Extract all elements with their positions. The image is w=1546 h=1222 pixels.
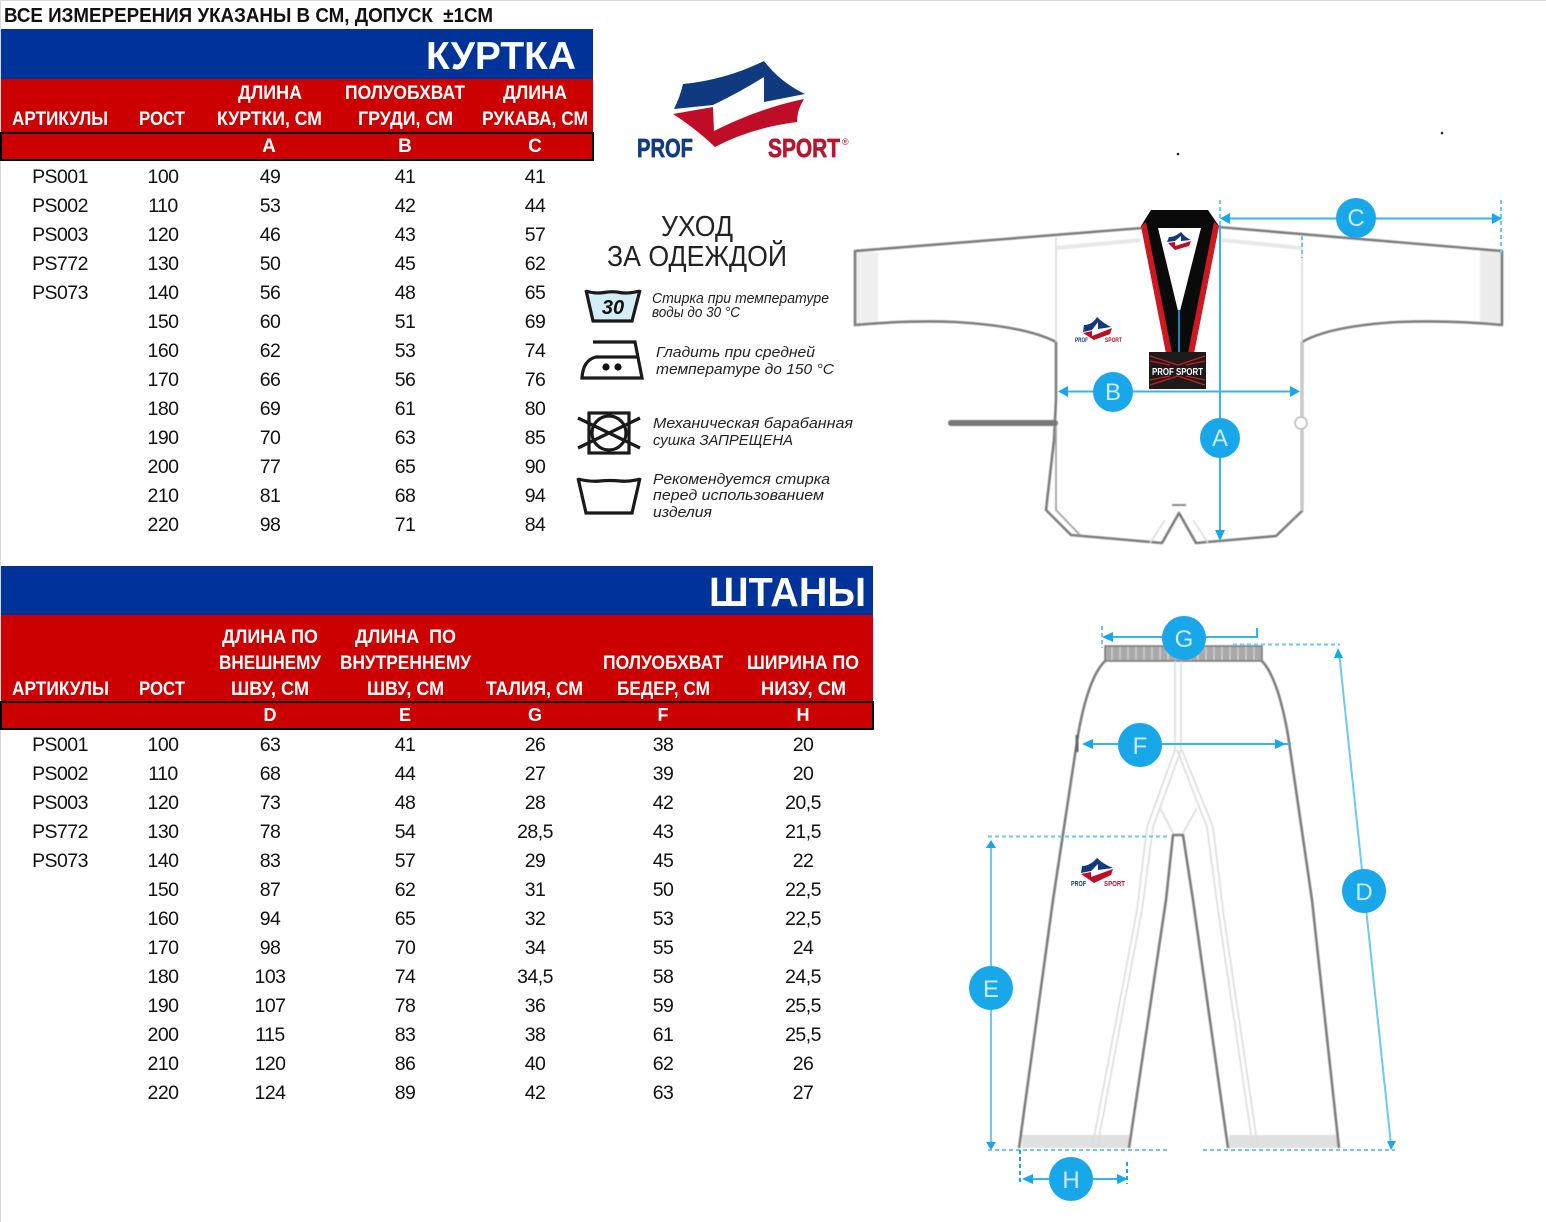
trousers table rows: 22: [793, 850, 813, 872]
trousers outline: [1019, 646, 1339, 1148]
trousers table rows: 124: [255, 1082, 286, 1104]
trousers table rows: 39: [653, 763, 673, 785]
trousers table rows: 115: [255, 1024, 285, 1046]
jacket table rows: 110: [148, 195, 178, 217]
trousers table rows: 53: [653, 908, 673, 930]
trousers table rows: 29: [525, 850, 545, 872]
jacket table rows: 50: [260, 253, 281, 275]
trousers table rows: 25,5: [785, 995, 822, 1017]
jacket table rows: PS002: [32, 195, 88, 217]
measure D: [1203, 644, 1396, 1150]
jacket table column headers: АРТИКУЛЫ: [12, 109, 108, 130]
panel: jacket size table: [1, 29, 593, 536]
trousers table rows: 100: [148, 734, 179, 756]
care heading: ЗА ОДЕЖДОЙ: [607, 239, 787, 273]
trousers table rows: 55: [653, 937, 674, 959]
jacket table rows: 49: [260, 166, 280, 188]
trousers table rows: 57: [395, 850, 415, 872]
trousers table column headers: ДЛИНА ПО: [355, 627, 456, 648]
trousers table rows: 120: [148, 792, 179, 814]
panel: garment care: [578, 211, 853, 521]
care text: washing: воды до 30 °С: [652, 304, 740, 321]
trousers table column headers: АРТИКУЛЫ: [12, 679, 109, 700]
jacket table rows: 85: [525, 427, 546, 449]
trousers table rows: 78: [260, 821, 280, 843]
trousers table column headers: ВНЕШНЕМУ: [219, 653, 321, 674]
trousers table rows: 170: [148, 937, 179, 959]
jacket table rows: 48: [395, 282, 415, 304]
jacket table column headers: ДЛИНА: [503, 83, 567, 104]
trousers table rows: 110: [148, 763, 178, 785]
jacket table column headers: ПОЛУОБХВАТ: [345, 83, 465, 104]
trousers table column headers: ВНУТРЕННЕМУ: [340, 653, 471, 674]
jacket table rows: 120: [148, 224, 179, 246]
trousers table rows: 20: [793, 734, 814, 756]
trousers table measurement letters: E: [399, 705, 411, 725]
trousers table rows: 200: [148, 1024, 179, 1046]
jacket table column headers: КУРТКИ, СМ: [217, 109, 322, 130]
trousers table rows: 27: [525, 763, 545, 785]
measure D: D: [1355, 879, 1373, 906]
trousers logo: SPORT: [1104, 881, 1126, 888]
diagram: jacket: [855, 198, 1502, 543]
trousers table rows: 54: [395, 821, 416, 843]
care heading: УХОД: [661, 211, 733, 243]
jacket table rows: 210: [148, 485, 179, 507]
care text: washing: Стирка при температуре: [652, 290, 829, 307]
trousers table rows: 42: [653, 792, 673, 814]
trousers table rows: 83: [260, 850, 280, 872]
trousers table column headers: ШВУ, СМ: [231, 679, 309, 700]
jacket table rows: 42: [395, 195, 415, 217]
note: measurement tolerance: ВСЕ ИЗМЕРЕРЕНИЯ УКАЗАНЫ В СМ, ДОПУСК ±1СМ: [4, 5, 493, 27]
trousers table rows: 28,5: [517, 821, 554, 843]
trousers table measurement letters: H: [796, 705, 810, 725]
trousers table rows: 87: [260, 879, 280, 901]
jacket table rows: 65: [525, 282, 546, 304]
trousers table rows: 78: [395, 995, 415, 1017]
jacket table rows: 57: [525, 224, 545, 246]
jacket table measurement letters: A: [262, 136, 276, 157]
collar logo: [1167, 232, 1191, 250]
care text: tumble drying: Механическая барабанная: [653, 415, 853, 432]
jacket table rows: 94: [525, 485, 546, 507]
trousers table column headers: [1, 615, 873, 702]
trousers table rows: [32, 734, 822, 1104]
trousers table column headers: ШВУ, СМ: [367, 679, 444, 700]
trousers table measurement letters: G: [528, 705, 542, 725]
trousers table rows: 73: [260, 792, 280, 814]
trousers table measurement letters: [1, 702, 873, 729]
jacket table rows: 130: [148, 253, 179, 275]
trousers table rows: 41: [395, 734, 415, 756]
measure C: [1220, 198, 1502, 258]
trousers table rows: 190: [148, 995, 179, 1017]
trousers table rows: 94: [260, 908, 281, 930]
trousers table rows: 62: [653, 1053, 673, 1075]
jacket table rows: 180: [148, 398, 179, 420]
jacket table measurement letters: [1, 133, 593, 160]
jacket table rows: 150: [148, 311, 179, 333]
trousers table rows: PS003: [32, 792, 88, 814]
trousers table rows: 38: [653, 734, 673, 756]
trousers table rows: 38: [525, 1024, 545, 1046]
trousers table measurement letters: D: [264, 705, 276, 725]
jacket table rows: PS003: [32, 224, 88, 246]
measure G: [1102, 616, 1257, 660]
jacket table rows: 74: [525, 340, 546, 362]
jacket table rows: PS073: [32, 282, 88, 304]
measure A: [1200, 225, 1240, 541]
trousers table column headers: ДЛИНА ПО: [222, 627, 318, 648]
trousers table banner: [1, 566, 873, 615]
jacket tag: [1149, 352, 1206, 389]
jacket chest logo: [1075, 317, 1122, 344]
trousers table rows: 68: [260, 763, 280, 785]
trousers table rows: 62: [395, 879, 415, 901]
trousers table rows: 36: [525, 995, 545, 1017]
jacket table rows: 61: [395, 398, 415, 420]
jacket table rows: 190: [148, 427, 179, 449]
jacket table rows: 140: [148, 282, 179, 304]
measure H: H: [1062, 1167, 1080, 1194]
trousers table rows: 98: [260, 937, 280, 959]
logo: Prof Sport: PROF: [637, 133, 693, 163]
jacket table rows: 45: [395, 253, 416, 275]
jacket table rows: 43: [395, 224, 415, 246]
jacket table rows: 220: [148, 514, 179, 536]
jacket table rows: 69: [260, 398, 280, 420]
care text: ironing: [656, 344, 834, 378]
jacket outline: [855, 227, 1502, 543]
jacket table column headers: ДЛИНА: [238, 83, 302, 104]
jacket table banner: КУРТКА: [426, 35, 576, 78]
jacket table rows: 62: [525, 253, 545, 275]
trousers table rows: 24,5: [785, 966, 822, 988]
measure E: [969, 836, 1170, 1150]
jacket table rows: 63: [395, 427, 415, 449]
measure B: B: [1105, 379, 1121, 406]
jacket table banner: [1, 29, 593, 79]
jacket table column headers: РУКАВА, СМ: [482, 109, 588, 130]
jacket table rows: 56: [260, 282, 280, 304]
trousers table rows: 44: [395, 763, 416, 785]
measure A: A: [1212, 425, 1228, 452]
jacket table rows: 100: [148, 166, 179, 188]
trousers table rows: 50: [653, 879, 674, 901]
jacket table column headers: РОСТ: [139, 109, 185, 130]
care text: pre-wash: перед использованием: [653, 487, 824, 504]
jacket table rows: 51: [395, 311, 415, 333]
trousers table rows: 58: [653, 966, 673, 988]
jacket table rows: 62: [260, 340, 280, 362]
trousers table banner: ШТАНЫ: [709, 569, 866, 615]
trousers table rows: 27: [793, 1082, 813, 1104]
trousers table rows: PS073: [32, 850, 88, 872]
jacket table column headers: ГРУДИ, СМ: [358, 109, 453, 130]
jacket table rows: 76: [525, 369, 545, 391]
jacket chest logo: SPORT: [1105, 337, 1122, 344]
care text: pre-wash: Рекомендуется стирка: [653, 471, 830, 488]
jacket table rows: 66: [260, 369, 280, 391]
jacket table rows: 60: [260, 311, 281, 333]
measure F: F: [1133, 733, 1147, 760]
jacket table rows: 65: [395, 456, 416, 478]
trousers table rows: 22,5: [785, 908, 822, 930]
trousers table rows: 42: [525, 1082, 545, 1104]
jacket table rows: 170: [148, 369, 179, 391]
jacket table rows: [32, 166, 546, 536]
care text: pre-wash: [653, 471, 830, 521]
measure B: [1058, 372, 1300, 412]
trousers table rows: 130: [148, 821, 179, 843]
trousers table rows: 20,5: [785, 792, 822, 814]
jacket table rows: 70: [260, 427, 281, 449]
trousers table column headers: ПОЛУОБХВАТ: [603, 653, 723, 674]
panel: trousers size table: [1, 566, 873, 1104]
jacket table rows: 68: [395, 485, 415, 507]
trousers table rows: 61: [653, 1024, 673, 1046]
trousers table rows: 107: [255, 995, 285, 1017]
jacket table rows: 71: [395, 514, 415, 536]
jacket collar: [1141, 210, 1219, 353]
care text: pre-wash: изделия: [653, 504, 712, 521]
trousers table rows: 24: [793, 937, 814, 959]
trousers table rows: 26: [525, 734, 545, 756]
jacket table rows: 81: [260, 485, 280, 507]
jacket table rows: 90: [525, 456, 546, 478]
trousers table rows: 48: [395, 792, 415, 814]
jacket chest logo: PROF: [1075, 337, 1088, 344]
jacket table rows: 53: [260, 195, 280, 217]
trousers table rows: 63: [653, 1082, 673, 1104]
trousers table rows: 22,5: [785, 879, 822, 901]
care text: ironing: температуре до 150 °С: [656, 361, 834, 378]
icon: wash at 30 degrees: 30: [602, 297, 624, 319]
trousers table rows: 180: [148, 966, 179, 988]
trousers table rows: 59: [653, 995, 673, 1017]
trousers table rows: 25,5: [785, 1024, 822, 1046]
trousers table rows: PS772: [32, 821, 88, 843]
trousers table rows: 40: [525, 1053, 546, 1075]
jacket table rows: 41: [395, 166, 415, 188]
trousers table rows: 43: [653, 821, 673, 843]
trousers table rows: 86: [395, 1053, 415, 1075]
jacket tag: PROF SPORT: [1152, 367, 1203, 378]
trousers table rows: 28: [525, 792, 545, 814]
care text: tumble drying: [653, 415, 853, 449]
measure G: G: [1175, 626, 1193, 653]
trousers table rows: 220: [148, 1082, 179, 1104]
trousers table column headers: НИЗУ, СМ: [761, 679, 846, 700]
jacket table rows: 98: [260, 514, 280, 536]
trousers table column headers: ТАЛИЯ, СМ: [486, 679, 583, 700]
trousers table rows: 26: [793, 1053, 813, 1075]
care text: washing: [652, 290, 829, 321]
trousers table column headers: БЕДЕР, СМ: [617, 679, 710, 700]
trousers table rows: PS001: [32, 734, 88, 756]
trousers table rows: 20: [793, 763, 814, 785]
trousers table rows: 160: [148, 908, 179, 930]
trousers table measurement letters: F: [658, 705, 668, 725]
logo: Prof Sport: ®: [842, 137, 849, 147]
trousers table column headers: ШИРИНА ПО: [747, 653, 859, 674]
measure F: [1082, 723, 1291, 767]
trousers table rows: 31: [525, 879, 545, 901]
measure E: E: [983, 976, 999, 1003]
trousers table rows: 83: [395, 1024, 415, 1046]
icon: wash tub: [578, 478, 640, 513]
trousers table rows: 65: [395, 908, 416, 930]
jacket table measurement letters: B: [398, 136, 412, 157]
jacket table rows: 46: [260, 224, 280, 246]
jacket table rows: 160: [148, 340, 179, 362]
trousers table rows: 34: [525, 937, 546, 959]
care heading: [607, 211, 787, 273]
trousers logo: PROF: [1071, 881, 1087, 888]
jacket table rows: 56: [395, 369, 415, 391]
logo: Prof Sport: [637, 61, 849, 163]
trousers table column headers: РОСТ: [139, 679, 185, 700]
icon: iron medium temperature: [582, 342, 642, 378]
jacket table rows: 84: [525, 514, 546, 536]
icon: wash at 30 degrees: [586, 290, 640, 321]
icon: no tumble drying: [578, 413, 640, 453]
trousers table rows: 21,5: [785, 821, 822, 843]
jacket table rows: 41: [525, 166, 545, 188]
jacket table rows: 53: [395, 340, 415, 362]
jacket table rows: PS001: [32, 166, 88, 188]
trousers table rows: 74: [395, 966, 416, 988]
jacket table rows: 200: [148, 456, 179, 478]
jacket table column headers: [1, 79, 593, 133]
trousers table rows: 103: [255, 966, 285, 988]
jacket table rows: PS772: [32, 253, 88, 275]
trousers table rows: PS002: [32, 763, 88, 785]
trousers table rows: 120: [255, 1053, 286, 1075]
diagram: trousers: [969, 616, 1396, 1201]
trousers table rows: 34,5: [517, 966, 554, 988]
trousers table rows: 210: [148, 1053, 179, 1075]
trousers logo: [1071, 858, 1126, 888]
care text: ironing: Гладить при средней: [656, 344, 816, 361]
measure C: C: [1347, 205, 1365, 232]
jacket table rows: 80: [525, 398, 546, 420]
trousers table rows: 63: [260, 734, 280, 756]
jacket table rows: 44: [525, 195, 546, 217]
trousers table rows: 89: [395, 1082, 415, 1104]
jacket table rows: 77: [260, 456, 280, 478]
care text: tumble drying: сушка ЗАПРЕЩЕНА: [653, 432, 793, 449]
measure H: [1020, 1150, 1128, 1201]
trousers table rows: 45: [653, 850, 674, 872]
jacket table rows: 69: [525, 311, 545, 333]
trousers table rows: 70: [395, 937, 416, 959]
trousers table rows: 150: [148, 879, 179, 901]
trousers table rows: 140: [148, 850, 179, 872]
logo: Prof Sport: SPORT: [768, 133, 840, 163]
trousers table rows: 32: [525, 908, 545, 930]
jacket table measurement letters: C: [528, 136, 542, 157]
